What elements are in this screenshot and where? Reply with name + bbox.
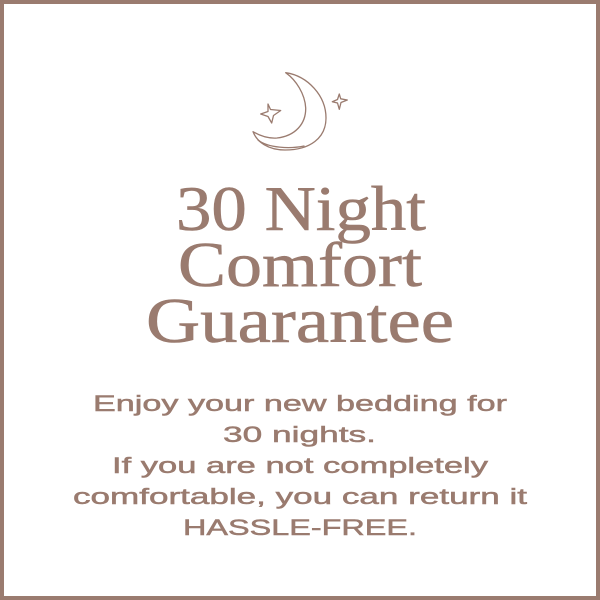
body text: comfortable, you can return it: [73, 484, 528, 509]
body text: [73, 391, 528, 540]
title: Guarantee: [146, 285, 454, 356]
body text: 30 nights.: [223, 422, 376, 447]
title: 30 Night: [176, 173, 426, 244]
title: [146, 173, 454, 356]
icon: crescent moon with stars: [253, 73, 347, 150]
body text: If you are not completely: [112, 453, 489, 478]
title: Comfort: [178, 229, 422, 300]
body text: Enjoy your new bedding for: [93, 391, 508, 416]
body text: HASSLE-FREE.: [183, 515, 417, 540]
